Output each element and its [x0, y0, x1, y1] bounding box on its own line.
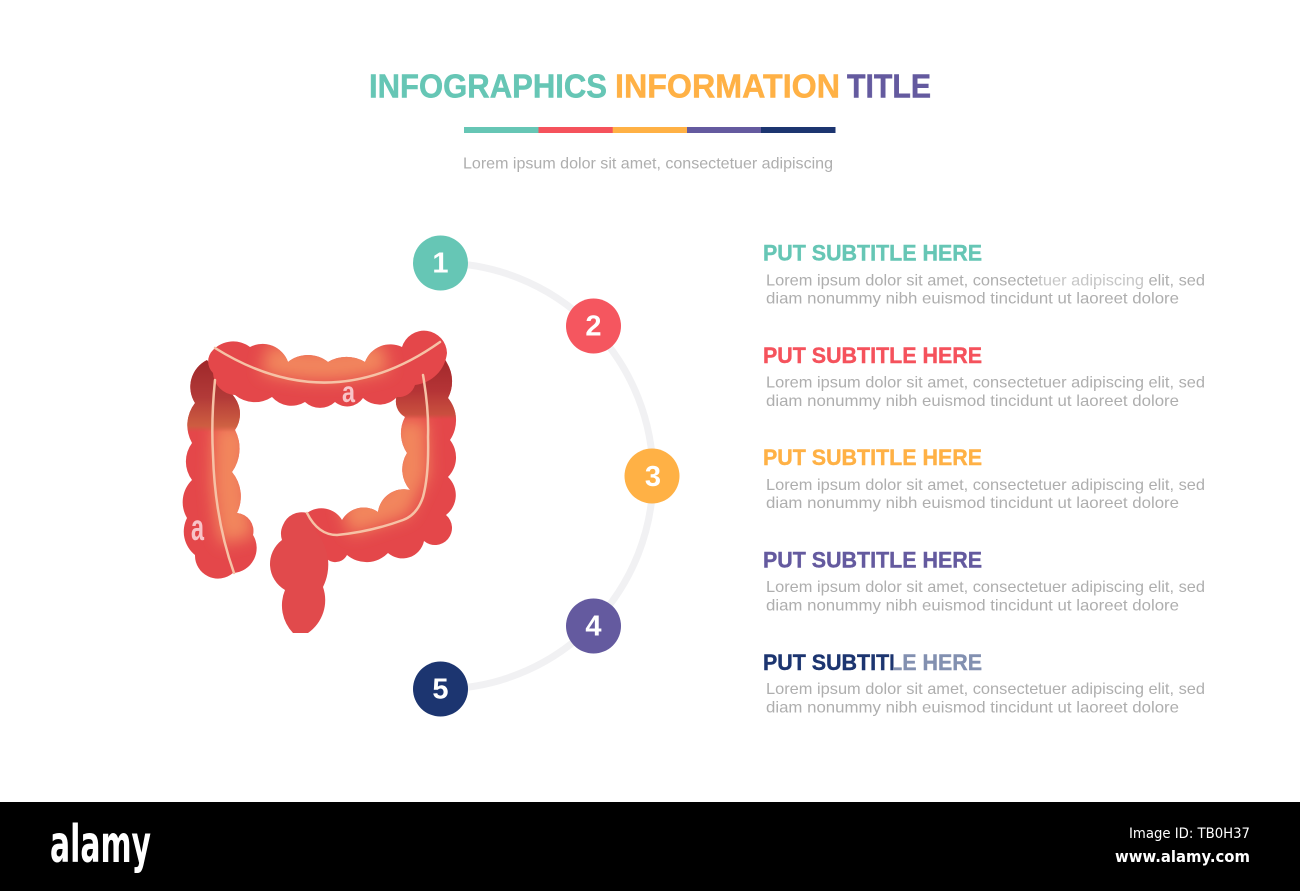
item 2: diam nonummy nibh euismod tincidunt ut laoreet dolore: [766, 393, 1179, 410]
node 1: [413, 236, 468, 290]
icon: large intestine: [175, 325, 465, 633]
item 3: diam nonummy nibh euismod tincidunt ut laoreet dolore: [766, 495, 1179, 512]
title: INFOGRAPHICS: [369, 68, 607, 104]
node 3: [624, 448, 680, 504]
node 4: [566, 598, 621, 654]
node 5: 5: [432, 674, 449, 706]
node 1: 1: [432, 248, 449, 280]
alamy logo: alamy: [50, 815, 151, 875]
item 4: [763, 548, 1205, 614]
item 2: [763, 343, 1205, 410]
item 1: PUT SUBTITLE HERE: [763, 240, 982, 266]
title colour bar: [464, 127, 836, 133]
icon: large intestine: a: [342, 376, 355, 409]
item 1: [763, 240, 1205, 308]
title: [369, 68, 931, 104]
node 2: [566, 298, 621, 354]
item 5: Lorem ipsum dolor sit amet, consectetuer adipiscing elit, sed: [766, 681, 1205, 698]
node 5: [413, 662, 468, 716]
item 5: diam nonummy nibh euismod tincidunt ut laoreet dolore: [766, 700, 1179, 716]
item 3: [763, 445, 1205, 512]
website: www.alamy.com: [1115, 847, 1250, 866]
title: INFORMATION: [615, 68, 840, 104]
item 5: [763, 650, 1205, 716]
node 3: 3: [645, 461, 661, 493]
node 4: 4: [585, 610, 602, 642]
title subtext: Lorem ipsum dolor sit amet, consectetuer adipiscing: [463, 156, 833, 172]
item 4: PUT SUBTITLE HERE: [763, 548, 982, 572]
image id: Image ID: TB0H37: [1129, 826, 1250, 842]
watermark letters: a: [191, 507, 204, 548]
rectum: [270, 512, 328, 633]
ring connector: [440, 263, 653, 689]
node 2: 2: [585, 310, 602, 342]
item 2: PUT SUBTITLE HERE: [763, 343, 982, 368]
item 3: Lorem ipsum dolor sit amet, consectetuer adipiscing elit, sed: [766, 477, 1205, 494]
item 5: PUT SUBTITLE HERE: [763, 650, 982, 675]
item 2: Lorem ipsum dolor sit amet, consectetuer adipiscing elit, sed: [766, 374, 1205, 392]
item 3: PUT SUBTITLE HERE: [763, 445, 982, 470]
item 1: Lorem ipsum dolor sit amet, consectetuer adipiscing elit, sed: [766, 272, 1205, 290]
item 4: Lorem ipsum dolor sit amet, consectetuer adipiscing elit, sed: [766, 579, 1205, 596]
item 1: diam nonummy nibh euismod tincidunt ut laoreet dolore: [766, 290, 1179, 308]
footer bar: [0, 802, 1300, 891]
item 4: diam nonummy nibh euismod tincidunt ut laoreet dolore: [766, 598, 1179, 614]
mesentery bands: [212, 342, 440, 573]
title: TITLE: [847, 68, 931, 104]
